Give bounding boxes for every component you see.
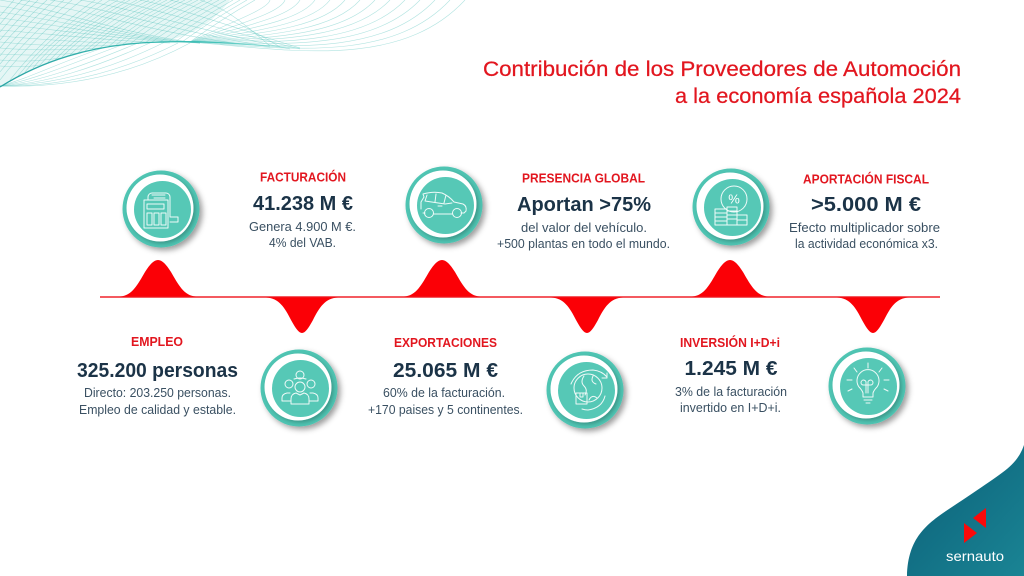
heading: FACTURACIÓN	[260, 170, 346, 184]
description: Efecto multiplicador sobre	[789, 220, 940, 235]
logo mark	[964, 508, 986, 543]
panel: exportaciones	[368, 335, 624, 428]
panel: empleo	[77, 334, 338, 426]
icon: light bulb	[828, 348, 906, 424]
heading: PRESENCIA GLOBAL	[522, 170, 645, 186]
description: Directo: 203.250 personas.	[84, 385, 231, 400]
logo wordmark: sernauto	[946, 548, 1004, 564]
title	[483, 58, 961, 108]
description	[497, 220, 670, 251]
description: Empleo de calidad y estable.	[79, 402, 236, 417]
description: +500 plantas en todo el mundo.	[497, 236, 670, 251]
heading: EXPORTACIONES	[394, 335, 497, 350]
description: 3% de la facturación	[675, 384, 787, 399]
description: Genera 4.900 M €.	[249, 219, 356, 234]
description: invertido en I+D+i.	[680, 400, 781, 415]
panel: facturación	[122, 170, 356, 250]
wave highlight	[0, 42, 300, 87]
value: 1.245 M €	[684, 357, 778, 380]
corner logo panel	[907, 445, 1024, 576]
value: >5.000 M €	[811, 193, 922, 216]
value: 25.065 M €	[393, 359, 499, 382]
description: 4% del VAB.	[269, 235, 336, 250]
decorative wave lines	[0, 0, 465, 86]
decorative mesh tint	[0, 0, 230, 87]
timeline wave	[100, 260, 940, 333]
icon: coins and percent	[692, 168, 770, 246]
panel: inversión I+D+i	[675, 335, 906, 424]
description: +170 paises y 5 continentes.	[368, 402, 523, 417]
description	[249, 219, 356, 250]
panel: presencia global	[406, 166, 670, 251]
description: del valor del vehículo.	[521, 220, 647, 235]
value: 325.200 personas	[77, 359, 238, 382]
description	[675, 384, 787, 415]
panel: aportación fiscal	[692, 168, 940, 251]
description: la actividad económica x3.	[795, 236, 938, 251]
icon: car	[406, 166, 482, 244]
icon: coins and percent: %	[728, 192, 740, 206]
heading: EMPLEO	[131, 334, 183, 349]
icon: people	[260, 350, 338, 426]
value: Aportan >75%	[517, 193, 651, 216]
heading: INVERSIÓN I+D+i	[680, 335, 780, 350]
description	[368, 385, 523, 417]
heading: APORTACIÓN FISCAL	[803, 172, 929, 186]
description	[789, 220, 940, 251]
title: a la economía española 2024	[675, 85, 961, 108]
icon: globe with arrows	[546, 352, 624, 428]
description	[79, 385, 236, 417]
value: 41.238 M €	[253, 192, 354, 215]
title: Contribución de los Proveedores de Automoción	[483, 58, 961, 81]
icon: cash register	[122, 170, 200, 248]
description: 60% de la facturación.	[383, 385, 505, 400]
